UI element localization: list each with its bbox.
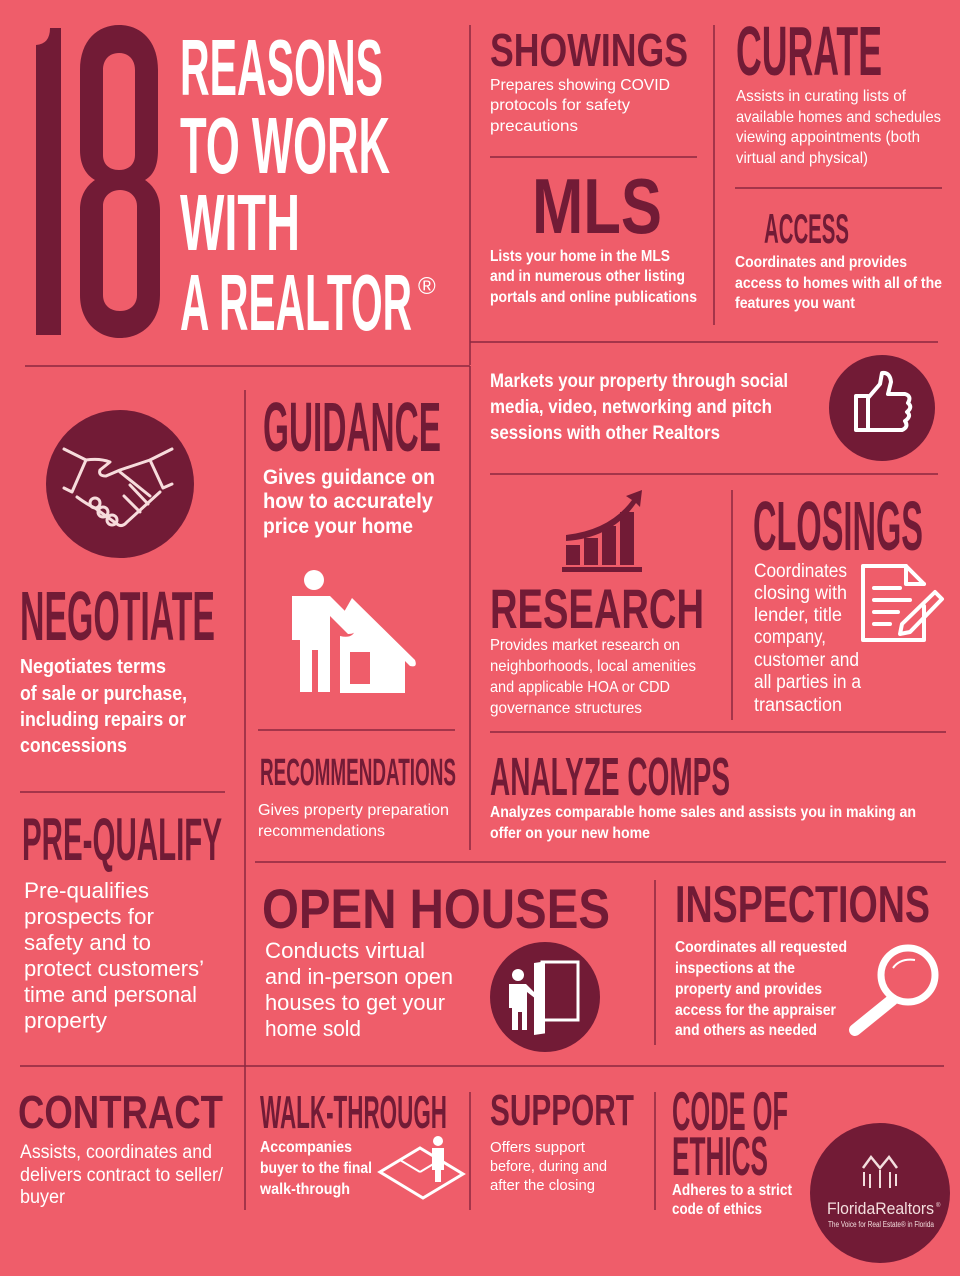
walk-through: buyer to the final bbox=[260, 1160, 372, 1177]
text: GUIDANCE bbox=[263, 388, 441, 466]
pre-qualify: time and personal bbox=[24, 982, 197, 1007]
showings: protocols for safety bbox=[490, 97, 630, 114]
icon: person at door bbox=[490, 942, 600, 1052]
research bbox=[490, 577, 704, 717]
title: 18 reasons: TO WORK bbox=[180, 101, 390, 190]
analyze comps: ANALYZE COMPS bbox=[490, 747, 730, 807]
curate bbox=[736, 12, 941, 167]
open houses: home sold bbox=[265, 1016, 361, 1041]
mls bbox=[490, 162, 697, 306]
text: RECOMMENDATIONS bbox=[260, 752, 456, 794]
analyze comps bbox=[490, 747, 916, 842]
icon: person with house bbox=[292, 570, 416, 693]
icon: handshake bbox=[46, 410, 194, 558]
walk-through: Accompanies bbox=[260, 1139, 352, 1156]
mls: Lists your home in the MLS bbox=[490, 248, 670, 265]
logo: Florida Realtors bbox=[810, 1123, 950, 1263]
title: 18 reasons: WITH bbox=[180, 178, 300, 267]
support: before, during and bbox=[490, 1158, 607, 1175]
mls: portals and online publications bbox=[490, 289, 697, 306]
icon: research chart bbox=[562, 490, 642, 572]
walk-through: walk-through bbox=[259, 1181, 350, 1198]
contract: Assists, coordinates and bbox=[20, 1142, 212, 1163]
research: Provides market research on bbox=[490, 637, 680, 654]
pre-qualify: Pre-qualifies bbox=[24, 878, 149, 903]
open houses: OPEN HOUSES bbox=[262, 877, 610, 940]
curate: viewing appointments (both bbox=[736, 129, 920, 146]
pre-qualify: prospects for bbox=[24, 904, 154, 929]
mls: MLS bbox=[532, 162, 662, 250]
pre-qualify: property bbox=[24, 1008, 107, 1033]
closings: customer and bbox=[754, 650, 859, 671]
icon: document with pen bbox=[863, 566, 942, 640]
open houses: Conducts virtual bbox=[265, 938, 425, 963]
access bbox=[735, 205, 942, 312]
curate: virtual and physical) bbox=[736, 150, 868, 167]
contract: CONTRACT bbox=[18, 1086, 223, 1138]
showings: precautions bbox=[490, 118, 578, 135]
closings: all parties in a bbox=[754, 672, 861, 693]
icon: magnifier bbox=[855, 948, 935, 1030]
inspections: and others as needed bbox=[675, 1022, 817, 1039]
closings bbox=[753, 487, 923, 716]
showings bbox=[490, 24, 688, 135]
marketing: sessions with other Realtors bbox=[490, 423, 720, 444]
logo: Florida Realtors: FloridaRealtors bbox=[827, 1199, 934, 1218]
negotiate bbox=[20, 577, 215, 757]
guidance: price your home bbox=[263, 515, 413, 538]
marketing bbox=[490, 371, 788, 444]
access: Coordinates and provides bbox=[735, 254, 907, 271]
big number 18 bbox=[36, 25, 160, 338]
title: 18 reasons: A REALTOR bbox=[180, 258, 412, 347]
text: PRE-QUALIFY bbox=[22, 806, 222, 873]
open houses bbox=[262, 877, 610, 1041]
closings: lender, title bbox=[754, 605, 842, 626]
open houses: and in-person open bbox=[265, 964, 453, 989]
contract: buyer bbox=[20, 1187, 66, 1208]
title: 18 reasons bbox=[36, 23, 436, 347]
pre-qualify: safety and to bbox=[24, 930, 151, 955]
inspections bbox=[675, 876, 930, 1039]
logo: Florida Realtors: The Voice for Real Estate® in Florida bbox=[828, 1220, 934, 1229]
pre-qualify: protect customers’ bbox=[24, 956, 204, 981]
recommendations bbox=[258, 752, 456, 840]
guidance bbox=[263, 388, 441, 538]
showings: Prepares showing COVID bbox=[490, 77, 670, 94]
logo: Florida Realtors: ® bbox=[936, 1202, 941, 1209]
code of ethics: Adheres to a strict bbox=[672, 1182, 793, 1199]
closings: Coordinates bbox=[754, 561, 847, 582]
access: features you want bbox=[735, 295, 856, 312]
icon: thumbs up bbox=[829, 355, 935, 461]
support bbox=[490, 1086, 634, 1194]
support: Offers support bbox=[490, 1139, 586, 1156]
title: 18 reasons: REASONS bbox=[180, 23, 383, 112]
research: RESEARCH bbox=[490, 577, 704, 640]
analyze comps: offer on your new home bbox=[490, 825, 650, 842]
code of ethics bbox=[672, 1080, 793, 1218]
analyze comps: Analyzes comparable home sales and assists you in making an bbox=[490, 804, 916, 821]
showings: SHOWINGS bbox=[490, 24, 688, 76]
contract bbox=[18, 1086, 224, 1208]
recommendations: Gives property preparation bbox=[258, 802, 449, 819]
research: neighborhoods, local amenities bbox=[490, 658, 696, 675]
support: after the closing bbox=[490, 1177, 595, 1194]
inspections: Coordinates all requested bbox=[675, 939, 847, 956]
support: SUPPORT bbox=[490, 1086, 634, 1135]
text: WALK-THROUGH bbox=[260, 1086, 447, 1138]
guidance: Gives guidance on bbox=[263, 466, 435, 489]
negotiate: Negotiates terms bbox=[20, 656, 166, 678]
icon: walk-through floor plan bbox=[380, 1136, 463, 1198]
title: 18 reasons: ® bbox=[418, 273, 436, 300]
contract: delivers contract to seller/ bbox=[20, 1165, 224, 1186]
code of ethics: code of ethics bbox=[672, 1201, 762, 1218]
research: and applicable HOA or CDD bbox=[490, 679, 670, 696]
access: ACCESS bbox=[764, 205, 849, 252]
inspections: access for the appraiser bbox=[675, 1002, 836, 1019]
mls: and in numerous other listing bbox=[490, 268, 685, 285]
research: governance structures bbox=[490, 700, 642, 717]
recommendations: recommendations bbox=[258, 823, 385, 840]
curate: available homes and schedules bbox=[736, 109, 941, 126]
pre-qualify bbox=[22, 806, 222, 1033]
marketing: Markets your property through social bbox=[490, 371, 788, 392]
curate: Assists in curating lists of bbox=[736, 88, 907, 105]
guidance: how to accurately bbox=[263, 490, 433, 513]
walk-through bbox=[259, 1086, 447, 1198]
inspections: inspections at the bbox=[675, 960, 795, 977]
closings: company, bbox=[754, 627, 826, 648]
negotiate: of sale or purchase, bbox=[20, 683, 187, 705]
marketing: media, video, networking and pitch bbox=[490, 397, 772, 418]
text: CODE OF bbox=[672, 1080, 788, 1142]
closings: closing with bbox=[754, 583, 847, 604]
inspections: property and provides bbox=[675, 981, 822, 998]
text: NEGOTIATE bbox=[20, 577, 215, 655]
negotiate: including repairs or bbox=[20, 709, 186, 731]
negotiate: concessions bbox=[20, 735, 127, 757]
open houses: houses to get your bbox=[265, 990, 445, 1015]
code of ethics: ETHICS bbox=[672, 1125, 768, 1187]
closings: transaction bbox=[754, 695, 842, 716]
